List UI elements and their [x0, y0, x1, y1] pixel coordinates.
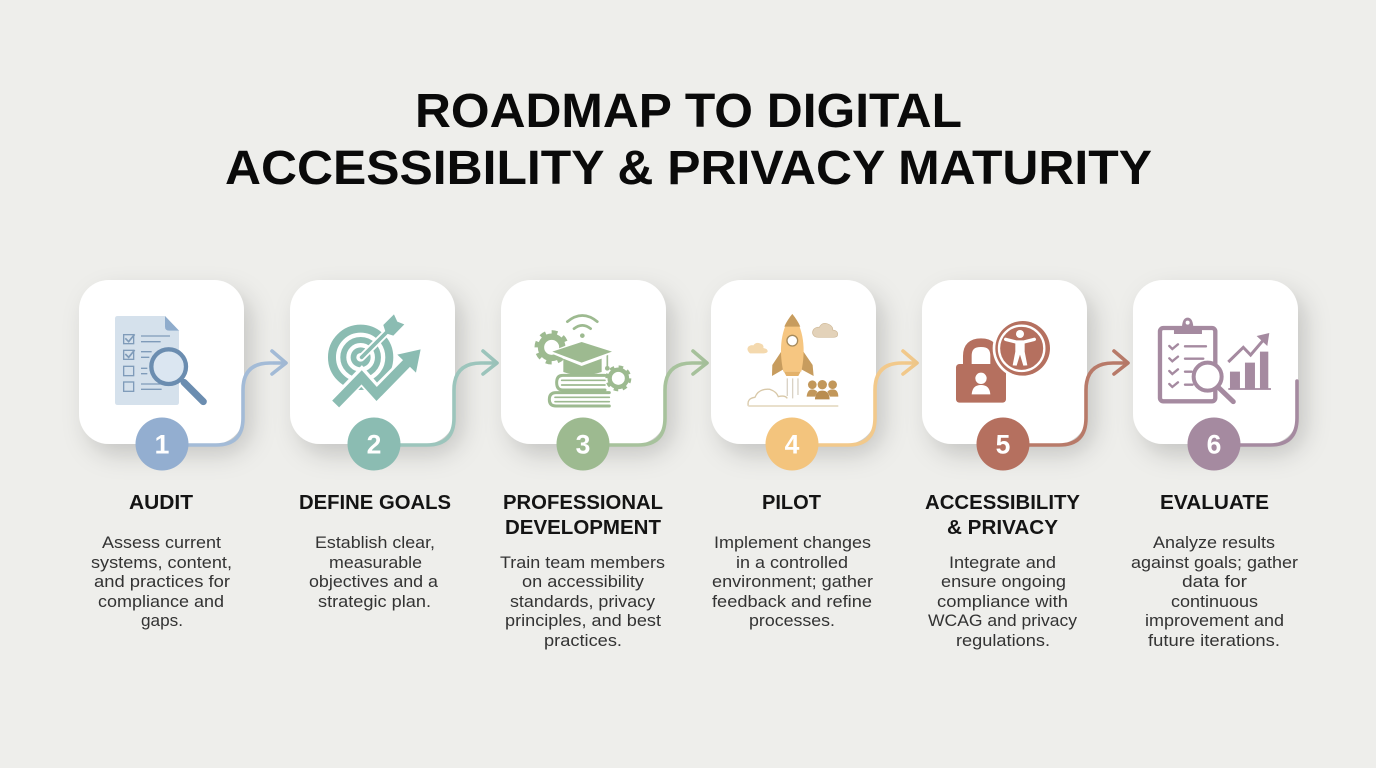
text: evaluate description: future iterations. — [1148, 631, 1280, 650]
number badge 2 — [348, 418, 400, 470]
connector arrow 2 to 3 — [397, 351, 497, 445]
text: define goals description: Establish clear, — [315, 533, 435, 552]
text: professional development description: practices. — [544, 631, 622, 650]
text: define goals description — [309, 533, 439, 611]
number badge 5: 5 — [996, 430, 1010, 460]
text: professional development description — [500, 553, 665, 650]
text: accessibility and privacy description: regulations. — [956, 631, 1050, 650]
text: audit description: Assess current — [102, 533, 221, 552]
text: pilot description: environment; gather — [712, 572, 873, 591]
connector arrow 5 to 6 — [1029, 351, 1128, 445]
heading: evaluate: EVALUATE — [1160, 491, 1269, 514]
heading: audit: AUDIT — [129, 491, 193, 514]
heading: professional development — [503, 491, 663, 539]
heading: professional development: DEVELOPMENT — [505, 516, 661, 539]
text: audit description: systems, content, — [91, 553, 232, 572]
panel: step 5 accessibility and privacy — [922, 280, 1128, 650]
panel: step 1 audit — [79, 280, 286, 630]
text: define goals description: strategic plan. — [318, 592, 431, 611]
icon: clipboard, magnifier and growth chart — [1160, 318, 1271, 402]
text: pilot description: feedback and refine — [712, 592, 872, 611]
text: professional development description: standards, privacy — [510, 592, 656, 611]
panel: step 4 pilot — [711, 280, 917, 630]
text: audit description — [91, 533, 232, 630]
icon: rocket launch with clouds and team — [747, 314, 838, 406]
title — [225, 85, 1152, 195]
text: evaluate description: Analyze results — [1153, 533, 1275, 552]
number badge 1 — [136, 418, 188, 470]
icon: padlock with accessibility symbol — [956, 318, 1053, 403]
text: professional development description: Train team members — [500, 553, 665, 572]
number badge 2: 2 — [367, 430, 381, 460]
text: audit description: compliance and — [98, 592, 224, 611]
text: pilot description — [712, 533, 873, 630]
text: evaluate description — [1131, 533, 1298, 650]
text: accessibility and privacy description: ensure ongoing — [941, 572, 1066, 591]
text: accessibility and privacy description — [928, 553, 1078, 650]
panel: step 3 professional development — [500, 280, 707, 650]
text: accessibility and privacy description: Integrate and — [949, 553, 1056, 572]
text: evaluate description: against goals; gather — [1131, 553, 1298, 572]
panel: step 2 define goals — [290, 280, 497, 611]
text: professional development description: on accessibility — [522, 572, 645, 591]
title: ACCESSIBILITY & PRIVACY MATURITY — [225, 142, 1152, 195]
number badge 6: 6 — [1207, 430, 1221, 460]
text: pilot description: processes. — [749, 611, 835, 630]
connector line 6 — [1240, 381, 1297, 445]
card 5 — [922, 280, 1087, 444]
text: evaluate description: continuous — [1171, 592, 1258, 611]
heading: accessibility and privacy — [925, 491, 1080, 539]
connector arrow 1 to 2 — [186, 351, 286, 445]
title: ROADMAP TO DIGITAL — [415, 85, 962, 138]
text: define goals description: measurable — [329, 553, 422, 572]
icon: document checklist with magnifier — [115, 316, 203, 405]
text: evaluate description: data for — [1182, 572, 1247, 591]
number badge 5 — [976, 418, 1030, 470]
heading: accessibility and privacy: & PRIVACY — [947, 516, 1058, 539]
text: evaluate description: improvement and — [1145, 611, 1284, 630]
card 6 — [1133, 280, 1298, 444]
text: pilot description: Implement changes — [714, 533, 871, 552]
card 2 — [290, 280, 455, 444]
text: accessibility and privacy description: compliance with — [937, 592, 1068, 611]
text: audit description: gaps. — [141, 611, 183, 630]
card 4 — [711, 280, 876, 444]
text: pilot description: in a controlled — [736, 553, 848, 572]
connector arrow 4 to 5 — [818, 351, 917, 445]
text: audit description: and practices for — [94, 572, 230, 591]
panel: step 6 evaluate — [1131, 280, 1298, 650]
number badge 3 — [556, 418, 610, 470]
number badge 1: 1 — [155, 430, 169, 460]
icon: target with arrow and rising chart — [332, 314, 421, 404]
card 3 — [501, 280, 666, 444]
heading: accessibility and privacy: ACCESSIBILITY — [925, 491, 1080, 514]
connector arrow 3 to 4 — [608, 351, 707, 445]
icon: graduation cap, books, gears and wifi — [537, 315, 629, 406]
number badge 4: 4 — [785, 430, 800, 460]
text: define goals description: objectives and a — [309, 572, 439, 591]
card 1 — [79, 280, 244, 444]
text: professional development description: principles, and best — [505, 611, 661, 630]
heading: define goals: DEFINE GOALS — [299, 491, 451, 514]
number badge 6 — [1188, 418, 1240, 470]
number badge 4 — [766, 418, 818, 470]
number badge 3: 3 — [576, 430, 590, 460]
heading: professional development: PROFESSIONAL — [503, 491, 663, 514]
heading: pilot: PILOT — [762, 491, 821, 514]
text: accessibility and privacy description: WCAG and privacy — [928, 611, 1078, 630]
